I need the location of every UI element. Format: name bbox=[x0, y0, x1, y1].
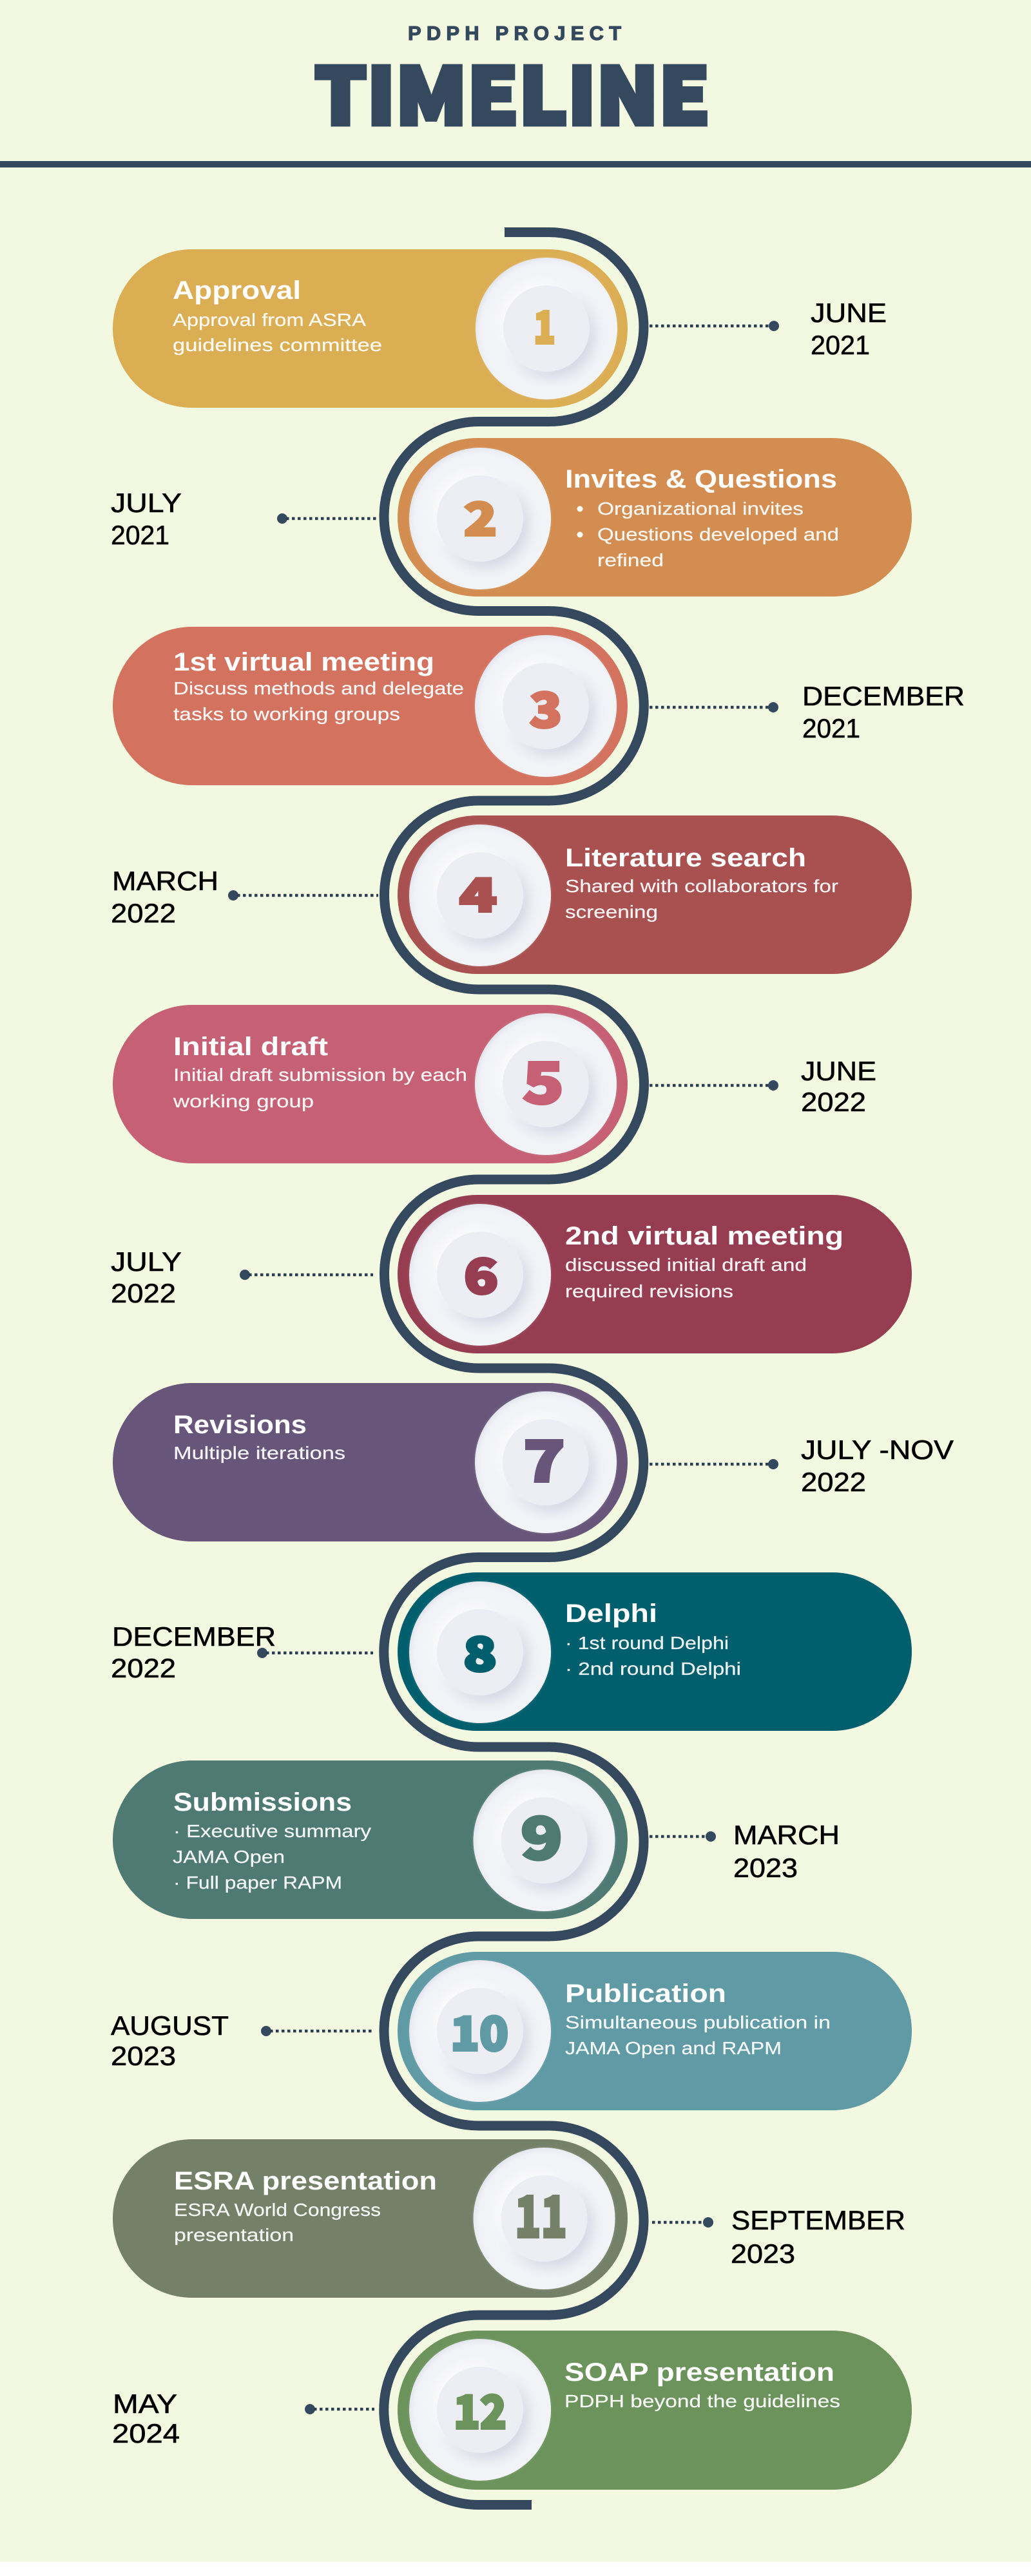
pill bbox=[113, 1005, 628, 1163]
row 10: Publication: JAMA Open and RAPM bbox=[565, 2038, 782, 2058]
row 2: Invites & Questions: refined bbox=[597, 550, 664, 570]
row 10: Publication bbox=[111, 1952, 912, 2110]
row 7: Revisions bbox=[113, 1383, 954, 1541]
connector bbox=[650, 1463, 769, 1465]
row 9: Submissions bbox=[113, 1760, 840, 1919]
date: MARCH bbox=[733, 1820, 840, 1850]
row 4: Literature search: 2022 bbox=[111, 898, 176, 928]
subtitle: PDPH PROJECT bbox=[408, 22, 621, 44]
number badge: 2 bbox=[464, 484, 497, 549]
description: Shared with collaborators for bbox=[565, 876, 838, 896]
date: AUGUST bbox=[111, 2010, 229, 2041]
row 8: Delphi bbox=[111, 1572, 912, 1731]
connector bbox=[240, 1270, 250, 1280]
number badge: 8 bbox=[463, 1617, 497, 1684]
heading: Publication bbox=[565, 1980, 726, 2008]
heading: Initial draft bbox=[173, 1033, 328, 1061]
bullets bbox=[577, 506, 583, 511]
pill bbox=[398, 816, 912, 974]
pill bbox=[113, 1760, 628, 1919]
number badge: 5 bbox=[523, 1038, 564, 1120]
number badge bbox=[409, 825, 551, 966]
number badge: 3 bbox=[530, 673, 562, 741]
connector bbox=[652, 2221, 704, 2224]
number badge bbox=[409, 448, 551, 589]
connector bbox=[257, 1648, 267, 1658]
number badge: 4 bbox=[459, 859, 497, 925]
title: TIMELINE bbox=[314, 34, 710, 147]
description: Simultaneous publication in bbox=[565, 2012, 831, 2032]
number badge: 12 bbox=[454, 2376, 506, 2442]
row 5: Initial draft bbox=[113, 1005, 876, 1163]
number badge: 6 bbox=[464, 1239, 498, 1308]
date: JULY -NOV bbox=[801, 1435, 954, 1465]
heading: Revisions bbox=[173, 1411, 307, 1439]
connector bbox=[305, 2404, 315, 2414]
heading: 1st virtual meeting bbox=[173, 648, 434, 676]
number badge bbox=[409, 1204, 551, 1346]
row 5: Initial draft: working group bbox=[173, 1091, 314, 1111]
number badge bbox=[475, 1391, 617, 1533]
number badge bbox=[473, 1770, 615, 1911]
row 12: SOAP presentation: 2024 bbox=[112, 2418, 180, 2448]
number badge: 7 bbox=[523, 1417, 565, 1498]
row 11: ESRA presentation: presentation bbox=[174, 2225, 294, 2245]
date: JULY bbox=[111, 488, 182, 518]
row 3: 1st virtual meeting: 2021 bbox=[802, 713, 860, 743]
pill bbox=[398, 1195, 912, 1353]
connector bbox=[650, 1835, 707, 1838]
header bbox=[314, 22, 710, 147]
serpentine path bbox=[384, 232, 644, 2504]
date: DECEMBER bbox=[802, 681, 965, 711]
row 1: Approval: guidelines committee bbox=[173, 335, 382, 355]
row 10: Publication: 2023 bbox=[111, 2041, 176, 2071]
description: PDPH beyond the guidelines bbox=[564, 2391, 840, 2411]
connector bbox=[650, 706, 769, 709]
row 6: 2nd virtual meeting bbox=[111, 1195, 912, 1353]
date: JULY bbox=[111, 1246, 182, 1277]
number badge bbox=[475, 635, 617, 777]
row 11: ESRA presentation bbox=[113, 2139, 905, 2298]
pill bbox=[398, 438, 912, 596]
connector bbox=[228, 890, 238, 901]
heading: SOAP presentation bbox=[564, 2358, 834, 2387]
row 11: ESRA presentation: 2023 bbox=[731, 2238, 795, 2269]
pill bbox=[113, 2139, 628, 2298]
row 9: Submissions: 2023 bbox=[733, 1853, 798, 1883]
connector bbox=[261, 2026, 271, 2036]
heading: 2nd virtual meeting bbox=[565, 1222, 843, 1250]
bullets: · Executive summary bbox=[173, 1821, 371, 1841]
heading: Literature search bbox=[565, 844, 806, 872]
connector bbox=[277, 513, 287, 524]
row 3: 1st virtual meeting: tasks to working groups bbox=[173, 704, 400, 724]
heading: ESRA presentation bbox=[174, 2167, 437, 2195]
row 9: Submissions: JAMA Open bbox=[173, 1847, 285, 1867]
pill bbox=[113, 249, 628, 408]
pill bbox=[398, 1572, 912, 1731]
number badge bbox=[409, 1581, 551, 1723]
row 3: 1st virtual meeting bbox=[113, 627, 965, 785]
description: ESRA World Congress bbox=[174, 2200, 381, 2220]
number badge: 1 bbox=[534, 292, 555, 356]
number badge bbox=[476, 258, 617, 399]
heading: Approval bbox=[173, 276, 301, 305]
number badge: 11 bbox=[515, 2172, 567, 2254]
row 12: SOAP presentation bbox=[112, 2331, 912, 2490]
connector bbox=[650, 1084, 769, 1087]
row 6: 2nd virtual meeting: required revisions bbox=[565, 1281, 733, 1301]
number badge: 10 bbox=[450, 1996, 508, 2064]
pill bbox=[398, 2331, 912, 2490]
row 6: 2nd virtual meeting: 2022 bbox=[111, 1278, 176, 1308]
row 8: Delphi: 2022 bbox=[111, 1653, 176, 1683]
row 2: Invites & Questions: Questions developed and bbox=[597, 524, 839, 544]
date: SEPTEMBER bbox=[731, 2205, 905, 2235]
connector bbox=[650, 325, 770, 327]
row 1: Approval bbox=[113, 249, 887, 408]
number badge: 9 bbox=[521, 1792, 563, 1876]
bullets: · 1st round Delphi bbox=[565, 1633, 729, 1653]
number badge bbox=[475, 1013, 617, 1155]
heading: Submissions bbox=[173, 1788, 352, 1817]
number badge bbox=[409, 2339, 551, 2481]
date: MARCH bbox=[112, 866, 218, 896]
row 4: Literature search bbox=[111, 816, 912, 974]
date: JUNE bbox=[801, 1056, 876, 1086]
row 4: Literature search: screening bbox=[565, 902, 658, 922]
heading: Invites & Questions bbox=[565, 465, 837, 493]
description: Initial draft submission by each bbox=[173, 1065, 467, 1085]
row 8: Delphi: · 2nd round Delphi bbox=[565, 1659, 741, 1679]
number badge bbox=[473, 2148, 615, 2289]
row 2: Invites & Questions: 2021 bbox=[111, 520, 169, 550]
pill bbox=[113, 627, 628, 785]
heading: Delphi bbox=[565, 1599, 657, 1628]
row 9: Submissions: · Full paper RAPM bbox=[173, 1873, 342, 1893]
row 1: Approval: 2021 bbox=[811, 330, 870, 360]
row 5: Initial draft: 2022 bbox=[801, 1087, 866, 1117]
description: Discuss methods and delegate bbox=[173, 678, 464, 698]
pill bbox=[398, 1952, 912, 2110]
date: MAY bbox=[113, 2389, 177, 2419]
description: discussed initial draft and bbox=[565, 1255, 807, 1275]
row 2: Invites & Questions: Organizational invites bbox=[597, 499, 804, 519]
date: JUNE bbox=[811, 298, 887, 328]
date: DECEMBER bbox=[112, 1621, 276, 1652]
description: Approval from ASRA bbox=[173, 310, 366, 330]
row 2: Invites & Questions bbox=[111, 438, 912, 596]
description: Multiple iterations bbox=[173, 1443, 345, 1463]
row 7: Revisions: 2022 bbox=[801, 1467, 866, 1497]
number badge bbox=[409, 1960, 551, 2102]
pill bbox=[113, 1383, 628, 1541]
